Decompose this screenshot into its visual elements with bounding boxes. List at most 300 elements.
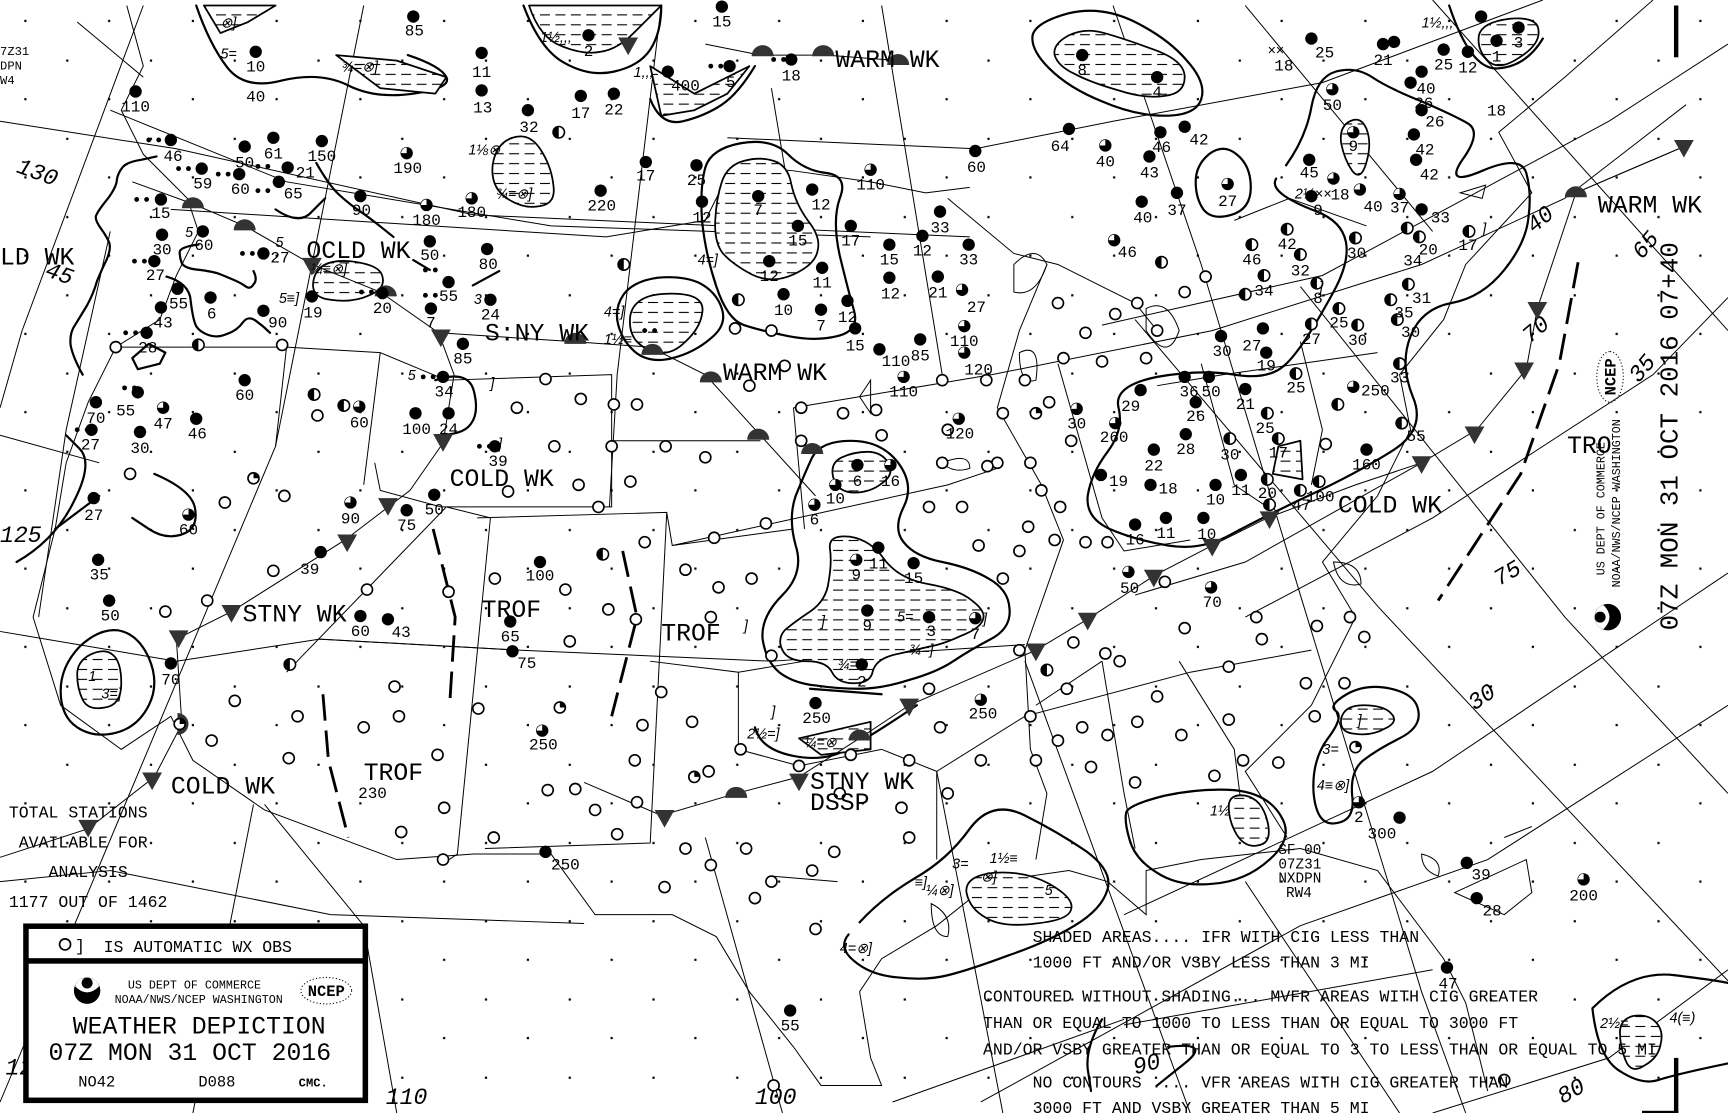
station ceiling numbers: 75	[517, 655, 536, 673]
station ceiling numbers: 85	[405, 22, 424, 40]
station ceiling numbers: 110	[121, 98, 150, 116]
station ceiling numbers: 47	[154, 416, 173, 434]
station ceiling numbers: 13	[473, 99, 492, 117]
grid degree labels: 125	[0, 523, 42, 549]
station ceiling numbers: 2	[1354, 809, 1364, 827]
visibility and weather annotations: ⊗]	[220, 16, 237, 32]
station ceiling numbers: 10	[774, 302, 793, 320]
visibility and weather annotations: 1	[88, 669, 96, 685]
station ceiling numbers: 25	[1434, 56, 1453, 74]
station ceiling numbers: 26	[1414, 95, 1433, 113]
chart codes: D088	[198, 1074, 235, 1092]
chart codes: NO42	[78, 1074, 115, 1092]
visibility and weather annotations: 1½,,,	[1422, 16, 1453, 32]
grid degree labels: 35	[1624, 350, 1662, 388]
station ceiling numbers: 25	[1256, 420, 1275, 438]
station ceiling numbers: 10	[1206, 492, 1225, 510]
station ceiling numbers: 46	[1118, 244, 1137, 262]
station ceiling numbers: 12	[838, 309, 857, 327]
visibility and weather annotations: 1½	[1210, 803, 1230, 819]
legend: flight category notes: THAN OR EQUAL TO 1000 TO LESS THAN OR EQUAL TO 3000 FT	[983, 1014, 1518, 1033]
station ceiling numbers: 33	[1431, 210, 1450, 228]
station ceiling numbers: 27	[1242, 337, 1261, 355]
station ceiling numbers: 27	[270, 249, 290, 267]
station ceiling numbers: 160	[1352, 456, 1381, 474]
station ceiling numbers: 65	[501, 628, 520, 646]
visibility and weather annotations: 3=]	[101, 687, 123, 703]
station ceiling numbers: 9	[1313, 202, 1323, 220]
station ceiling numbers: 15	[151, 205, 171, 223]
top-left clipped station note: W4	[0, 74, 15, 88]
front and trough labels: S:NY WK	[485, 321, 589, 349]
station ceiling numbers: 8	[1077, 62, 1087, 80]
station ceiling numbers: 46	[1242, 251, 1261, 269]
station ceiling numbers: 20	[1419, 242, 1438, 260]
surface observation note	[1278, 843, 1321, 902]
station ceiling numbers: 100	[526, 568, 554, 586]
visibility and weather annotations: 1½≡	[604, 332, 632, 348]
station count note: TOTAL STATIONS	[9, 804, 148, 823]
surface observation note: 07Z31	[1278, 857, 1321, 873]
station ceiling numbers: 6	[810, 512, 819, 530]
station ceiling numbers: 11	[1156, 525, 1176, 543]
front and trough labels: DSSP	[810, 790, 870, 818]
station ceiling numbers: 50	[425, 502, 444, 520]
station ceiling numbers: 18	[1159, 481, 1178, 499]
station ceiling numbers: 59	[193, 175, 212, 193]
station ceiling numbers: 46	[1152, 139, 1171, 157]
visibility and weather annotations: 5	[1045, 883, 1053, 899]
chart date: 07Z MON 31 OCT 2016	[49, 1040, 331, 1068]
station ceiling numbers: 12	[760, 268, 779, 286]
rotated department credit: US DEPT OF COMMERCE	[1595, 442, 1609, 575]
station ceiling numbers: 35	[1394, 304, 1414, 322]
station ceiling numbers: 30	[1067, 416, 1086, 434]
station ceiling numbers: 17	[636, 168, 655, 186]
station ceiling numbers: 12	[881, 286, 900, 304]
station ceiling numbers: 45	[1300, 164, 1319, 182]
station ceiling numbers: 39	[1472, 866, 1491, 884]
visibility and weather annotations: 4=]	[698, 252, 719, 268]
visibility and weather annotations: 5=	[897, 610, 913, 626]
station ceiling numbers: 31	[1412, 290, 1431, 308]
icon: rotated NCEP oval: NCEP	[1603, 358, 1621, 395]
front and trough labels: COLD WK	[1338, 492, 1442, 520]
visibility and weather annotations: ¼=⊗	[804, 735, 838, 751]
front and trough labels: TROF	[364, 760, 423, 788]
trough dashed lines	[323, 262, 1578, 838]
station ceiling numbers: 17	[841, 233, 860, 251]
station ceiling numbers: 60	[231, 181, 250, 199]
station ceiling numbers: 7	[971, 626, 980, 644]
front and trough labels: OCLD WK	[306, 238, 411, 266]
visibility and weather annotations: ]	[496, 437, 503, 453]
department credit: NOAA/NWS/NCEP WASHINGTON	[115, 993, 283, 1007]
station ceiling numbers: 4	[1152, 84, 1162, 102]
station ceiling numbers: 33	[959, 251, 978, 269]
station ceiling numbers: 50	[1323, 97, 1342, 115]
grid degree labels: 80	[1553, 1074, 1590, 1110]
visibility and weather annotations: 5	[408, 368, 416, 384]
station ceiling numbers: 250	[802, 710, 831, 728]
station ceiling numbers: 32	[519, 119, 539, 137]
station ceiling numbers: 27	[146, 267, 165, 285]
rotated department credit: NOAA/NWS/NCEP WASHINGTON	[1610, 419, 1624, 587]
legend: flight category notes: SHADED AREAS.... IFR WITH CIG LESS THAN	[1033, 928, 1419, 947]
station ceiling numbers: 50	[235, 155, 254, 173]
station ceiling numbers: 33	[1390, 369, 1409, 387]
station ceiling numbers: 11	[1231, 482, 1250, 500]
station ceiling numbers: 70	[1203, 594, 1222, 612]
station ceiling numbers: 46	[163, 148, 183, 166]
visibility and weather annotations: 4=⊗]	[840, 941, 873, 957]
visibility and weather annotations: 2½××	[1294, 186, 1331, 202]
chart corner marks	[1642, 6, 1678, 1113]
station ceiling numbers: 85	[911, 347, 930, 365]
visibility and weather annotations: 1,,,	[634, 65, 654, 81]
surface observation note: RW4	[1286, 886, 1312, 902]
visibility and weather annotations: 5≡]	[279, 291, 300, 307]
front and trough labels: COLD WK	[171, 773, 275, 801]
station ceiling numbers: 2	[584, 43, 593, 61]
icon: NOAA logo	[74, 977, 100, 1004]
station ceiling numbers: 260	[1100, 429, 1129, 447]
visibility and weather annotations: ]	[769, 704, 776, 720]
visibility and weather annotations: 5	[276, 235, 284, 251]
station ceiling numbers: 50	[1120, 580, 1139, 598]
partly cloudy stations: half circles	[174, 127, 1475, 782]
station ceiling numbers: 55	[439, 288, 458, 306]
station ceiling numbers: 32	[1291, 262, 1310, 280]
visibility and weather annotations: 1½≡	[990, 851, 1018, 867]
visibility and weather annotations: ¾=	[838, 657, 858, 673]
station ceiling numbers: 17	[571, 105, 590, 123]
station ceiling numbers: 8	[1313, 290, 1323, 308]
station ceiling numbers: 55	[1407, 428, 1426, 446]
station ceiling numbers: 34	[435, 384, 454, 402]
visibility and weather annotations: ¾=⊗]	[342, 60, 379, 76]
station ceiling numbers: 250	[969, 705, 997, 723]
station ceiling numbers: 250	[551, 856, 580, 874]
automatic observation key: IS AUTOMATIC WX OBS	[104, 938, 292, 957]
visibility and weather annotations: 3=	[1322, 742, 1339, 758]
legend: flight category notes: 1000 FT AND/OR VSBY LESS THAN 3 MI	[1033, 954, 1370, 973]
station ceiling numbers: 90	[341, 510, 360, 528]
station ceiling numbers: 7	[426, 314, 436, 332]
title box	[25, 926, 365, 1100]
visibility and weather annotations: 3	[474, 292, 482, 308]
station ceiling numbers: 15	[788, 233, 807, 251]
station ceiling numbers: 18	[782, 67, 801, 85]
station ceiling numbers: 27	[967, 299, 986, 317]
automatic observation key: ]	[75, 937, 85, 956]
station count note: ANALYSIS	[49, 863, 128, 882]
station ceiling numbers: 11	[869, 556, 888, 574]
reported stations: filled and mostly filled circles	[85, 0, 1590, 1017]
station ceiling numbers: 10	[826, 491, 845, 509]
station ceiling numbers: 30	[1401, 324, 1420, 342]
station ceiling numbers: 400	[671, 77, 700, 95]
station ceiling numbers: 39	[489, 453, 508, 471]
station ceiling numbers: 55	[781, 1017, 800, 1035]
station ceiling numbers: 50	[420, 247, 439, 265]
station ceiling numbers: 11	[472, 64, 491, 82]
automatic stations: open circles	[110, 271, 1510, 1091]
chart title: WEATHER DEPICTION	[73, 1014, 326, 1042]
grid degree labels: 120	[6, 1055, 47, 1081]
station ceiling numbers: 42	[1189, 131, 1209, 149]
front and trough labels: WARM WK	[723, 360, 827, 388]
station ceiling numbers: 26	[1186, 408, 1205, 426]
station ceiling numbers: 21	[1236, 396, 1255, 414]
station ceiling numbers: 60	[179, 521, 198, 539]
station ceiling numbers: 150	[307, 148, 336, 166]
station ceiling numbers: 47	[1292, 497, 1311, 515]
front and trough labels: TROF	[482, 597, 541, 625]
station ceiling numbers: 110	[856, 177, 885, 195]
visibility and weather annotations: ⊗]	[981, 870, 998, 886]
department credit	[115, 978, 283, 1007]
station ceiling numbers: 110	[882, 353, 910, 371]
station ceiling numbers: 12	[692, 210, 712, 228]
front and trough labels: LD WK	[0, 244, 75, 272]
station ceiling numbers: 6	[853, 473, 862, 491]
station ceiling numbers: 30	[1213, 343, 1232, 361]
front and trough labels: TRO	[1567, 433, 1612, 461]
front and trough labels: STNY WK	[242, 602, 347, 630]
station ceiling numbers: 42	[1420, 167, 1439, 185]
surface observation note: SF 00	[1278, 843, 1321, 859]
station ceiling numbers: 36	[1179, 384, 1199, 402]
visibility and weather annotations: 5	[185, 225, 193, 241]
station ceiling numbers: 34	[1254, 282, 1274, 300]
station ceiling numbers: 20	[373, 300, 392, 318]
station ceiling numbers: 17	[1458, 237, 1477, 255]
visibility and weather annotations: 1½,,,	[540, 30, 572, 46]
station ceiling numbers: 18	[1274, 58, 1293, 76]
station ceiling numbers: 25	[1315, 44, 1334, 62]
station ceiling numbers: 5	[726, 74, 735, 92]
grid degree labels: 130	[13, 154, 61, 193]
station ceiling numbers: 3	[926, 623, 936, 641]
station ceiling numbers: 21	[928, 285, 947, 303]
station ceiling numbers: 28	[138, 340, 157, 358]
visibility and weather annotations: ¼≡⊗]	[311, 261, 348, 277]
station ceiling numbers: 46	[188, 426, 207, 444]
rotated side title: 07Z MON 31 OCT 2016 07+40	[1655, 242, 1685, 630]
front and trough labels: COLD WK	[450, 466, 554, 494]
station ceiling numbers: 7	[816, 318, 826, 336]
station ceiling numbers: 27	[1218, 193, 1237, 211]
station ceiling numbers: 29	[1121, 398, 1140, 416]
front and trough labels	[0, 47, 1702, 818]
station ceiling numbers: 250	[1361, 383, 1390, 401]
legend: flight category notes	[983, 928, 1657, 1113]
front and trough labels: WARM WK	[1598, 193, 1702, 221]
icon: rotated NOAA logo	[1595, 604, 1621, 630]
station ceiling numbers: 27	[81, 437, 100, 455]
station ceiling numbers: 90	[352, 202, 371, 220]
station ceiling numbers: 16	[1126, 531, 1145, 549]
station ceiling numbers: 100	[1306, 488, 1335, 506]
station ceiling numbers: 6	[207, 305, 216, 323]
station ceiling numbers: 1	[1492, 49, 1501, 67]
station ceiling numbers: 30	[130, 440, 150, 458]
visibility and weather annotations: ]	[981, 612, 988, 628]
station ceiling numbers: 15	[904, 570, 923, 588]
legend: flight category notes: CONTOURED WITHOUT SHADING... MVFR AREAS WITH CIG GREATER	[983, 988, 1538, 1007]
grid degree labels: 30	[1464, 679, 1501, 717]
department credit: US DEPT OF COMMERCE	[128, 978, 261, 992]
station ceiling numbers: 250	[529, 736, 558, 754]
station ceiling numbers: 75	[397, 517, 416, 535]
visibility and weather annotations: 4(≡)	[1670, 1011, 1695, 1027]
station ceiling numbers: 190	[393, 160, 422, 178]
station count note: AVAILABLE FOR	[19, 833, 148, 852]
grid degree labels: 75	[1489, 556, 1526, 592]
visibility and weather annotations: 2½=	[1599, 1016, 1628, 1032]
station ceiling numbers: 9	[863, 617, 872, 635]
station ceiling numbers: 10	[1197, 526, 1216, 544]
station ceiling numbers: 22	[1144, 458, 1163, 476]
station ceiling numbers: 42	[1278, 236, 1297, 254]
station ceiling numbers: 43	[392, 624, 411, 642]
station ceiling numbers: 37	[1167, 202, 1187, 220]
icon: rotated NCEP oval	[1597, 352, 1623, 402]
station ceiling numbers: 300	[1368, 826, 1396, 844]
station ceiling numbers: 24	[481, 307, 500, 325]
station ceiling numbers: 34	[1403, 253, 1422, 271]
station ceiling numbers: 60	[235, 387, 254, 405]
front and trough labels: STNY WK	[810, 769, 914, 797]
station ceiling numbers: 27	[1302, 331, 1321, 349]
station ceiling numbers: 55	[116, 402, 135, 420]
visibility and weather annotations: 4=]	[604, 304, 625, 320]
station ceiling numbers: 11	[813, 275, 832, 293]
visibility and weather annotations: 5=	[220, 46, 237, 62]
station ceiling numbers: 33	[930, 220, 950, 238]
station ceiling numbers: 70	[161, 671, 180, 689]
grid degree labels: 45	[42, 258, 77, 292]
station ceiling numbers: 9	[851, 567, 861, 585]
station ceiling numbers: 25	[1286, 379, 1306, 397]
station ceiling numbers: 39	[300, 561, 319, 579]
visibility and weather annotations: 4≡⊗]	[1317, 778, 1350, 794]
station ceiling numbers: 30	[1220, 447, 1239, 465]
station ceiling numbers: 30	[152, 242, 172, 260]
station ceiling numbers: 22	[604, 102, 623, 120]
station ceiling numbers: 180	[457, 204, 486, 222]
precipitation dots near stations	[75, 57, 786, 449]
station ceiling numbers: 40	[246, 88, 265, 106]
station ceiling numbers: 40	[1096, 153, 1115, 171]
visibility and weather annotations: ]	[488, 376, 495, 392]
station ceiling numbers: 21	[1373, 52, 1393, 70]
station ceiling numbers: 55	[169, 296, 188, 314]
station ceiling numbers: 19	[303, 304, 323, 322]
station ceiling numbers: 50	[101, 607, 120, 625]
station ceiling numbers: 40	[1133, 210, 1152, 228]
station ceiling numbers: 18	[1330, 186, 1350, 204]
grid degree labels: 110	[386, 1085, 427, 1111]
visibility and weather annotations: ]	[1356, 713, 1363, 729]
visibility and weather annotations: 2½=]	[746, 726, 780, 742]
station ceiling numbers: 25	[687, 172, 706, 190]
grid degree labels: 100	[755, 1085, 797, 1111]
visibility and weather annotations: 3=	[952, 856, 968, 872]
visibility and weather annotations: ≡]	[915, 875, 928, 891]
station ceiling numbers: 28	[1483, 903, 1502, 921]
station ceiling numbers: 43	[154, 314, 173, 332]
top-left clipped station note	[0, 45, 29, 88]
station ceiling numbers: 90	[268, 314, 287, 332]
station ceiling numbers: 27	[84, 507, 103, 525]
station ceiling numbers: 120	[964, 362, 993, 380]
chart codes	[78, 1074, 328, 1092]
station ceiling numbers: 64	[1051, 138, 1070, 156]
visibility and weather annotations: ]	[742, 618, 749, 634]
station ceiling numbers: 16	[881, 473, 900, 491]
station ceiling numbers: 110	[950, 333, 979, 351]
station ceiling numbers: 20	[1258, 485, 1277, 503]
icon: NCEP oval: NCEP	[308, 983, 345, 1001]
station ceiling numbers: 17	[1269, 444, 1288, 462]
station ceiling numbers: 100	[402, 421, 431, 439]
station ceiling numbers: 19	[1257, 357, 1276, 375]
station ceiling numbers: 24	[439, 421, 458, 439]
station ceiling numbers: 2	[857, 674, 867, 692]
grid degree labels: 90	[1130, 1049, 1164, 1081]
visibility and weather annotations: ¼⊗]	[926, 883, 955, 899]
station ceiling numbers: 40	[1416, 81, 1436, 99]
station ceiling numbers: 21	[296, 164, 315, 182]
visibility and weather annotations: ]	[1317, 280, 1324, 296]
rotated department credit	[1595, 419, 1624, 587]
visibility and weather annotations: ]	[1480, 222, 1487, 238]
station ceiling numbers: 43	[1140, 164, 1159, 182]
station ceiling numbers: 50	[1202, 384, 1221, 402]
station ceiling numbers: 60	[350, 415, 369, 433]
station ceiling numbers: 60	[967, 159, 986, 177]
visibility and weather annotations: ]	[819, 614, 826, 630]
station ceiling numbers: 110	[889, 384, 918, 402]
grid degree labels: 70	[1517, 311, 1555, 349]
visibility and weather annotations: ¾=]	[909, 643, 934, 659]
front and trough labels: TROF	[661, 620, 721, 648]
station ceiling numbers: 60	[351, 623, 370, 641]
station ceiling numbers: 200	[1569, 887, 1598, 905]
station ceiling numbers: 60	[194, 237, 213, 255]
station ceiling numbers: 47	[1438, 975, 1458, 993]
station ceiling numbers: 15	[880, 251, 899, 269]
station ceiling numbers: 85	[453, 351, 472, 369]
station ceiling numbers: 61	[264, 146, 283, 164]
station ceiling numbers: 12	[811, 196, 831, 214]
front and trough labels: WARM WK	[835, 47, 940, 75]
top-left clipped station note: DPN	[0, 59, 22, 73]
surface observation note: NXDPN	[1278, 872, 1321, 888]
station ceiling numbers: 30	[1348, 332, 1367, 350]
station ceiling numbers: 18	[1487, 103, 1506, 121]
station ceiling numbers: 15	[712, 13, 731, 31]
station ceiling numbers: 25	[1329, 314, 1349, 332]
station ceiling numbers: 12	[913, 243, 932, 261]
station ceiling numbers: 42	[1415, 141, 1434, 159]
legend: flight category notes: NO CONTOURS .... VFR AREAS WITH CIG GREATER THAN	[1033, 1074, 1508, 1093]
station ceiling numbers: 19	[1109, 473, 1128, 491]
fronts	[0, 37, 1694, 857]
station ceiling numbers: 40	[1364, 199, 1383, 217]
